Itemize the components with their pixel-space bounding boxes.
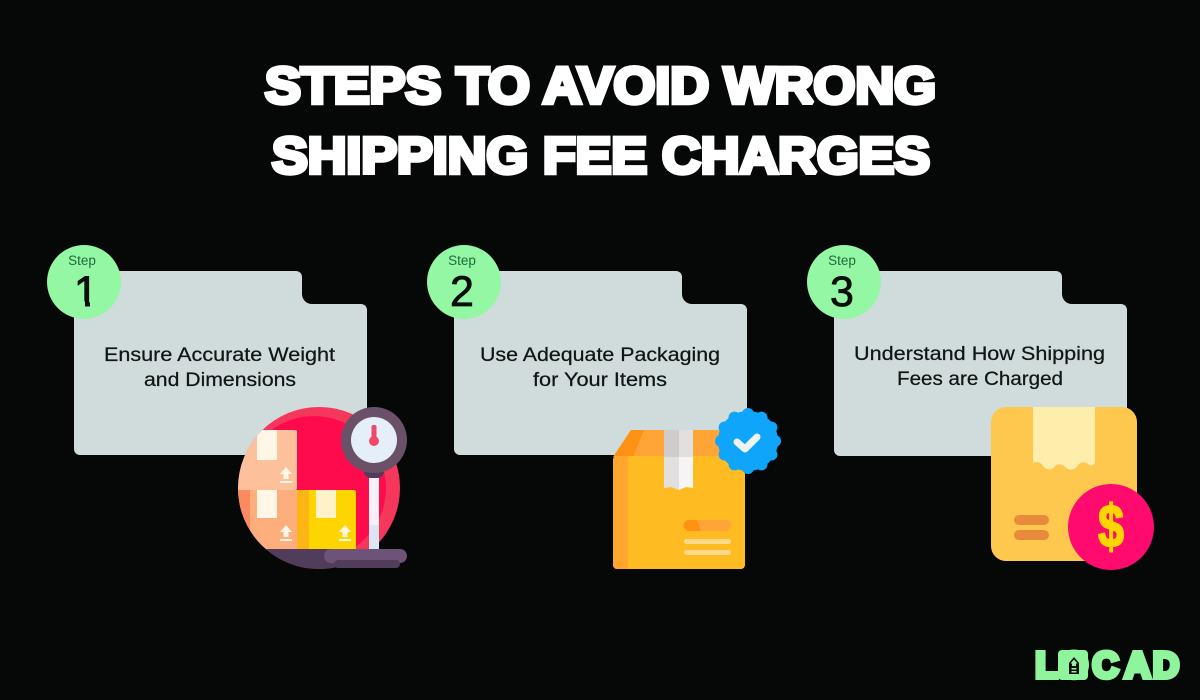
icon: parcel with dollar coin: $ [1098, 493, 1124, 560]
card 1 text: Ensure Accurate Weight [104, 344, 336, 366]
card 1 text: and Dimensions [144, 369, 296, 391]
icon: weighing scale with boxes [230, 407, 410, 571]
card 1 text [104, 344, 336, 391]
logo: LOCAD: LOCAD [1036, 644, 1179, 686]
step 2 badge: Step [448, 253, 476, 268]
card 3 text: Fees are Charged [897, 368, 1063, 390]
step 3 badge [807, 245, 881, 319]
card 3 text: Understand How Shipping [854, 343, 1105, 365]
step 1 badge: 1 [74, 268, 98, 316]
panel: step 1 [47, 245, 410, 571]
icon: cardboard box with verified badge [613, 408, 781, 569]
card 2 text: for Your Items [533, 369, 667, 391]
step 3 badge: 3 [830, 268, 854, 316]
icon: parcel with dollar coin [991, 407, 1154, 570]
card 2 text [480, 344, 720, 391]
card 3 background [834, 271, 1127, 456]
card 2 text: Use Adequate Packaging [480, 344, 720, 366]
card 1 background [74, 271, 367, 455]
panel: step 3 [807, 245, 1154, 570]
step 2 badge [427, 245, 501, 319]
step 1 badge [47, 245, 121, 319]
card 2 background [454, 271, 747, 455]
step 1 badge: Step [68, 253, 96, 268]
step 3 badge: Step [828, 253, 856, 268]
card 3 text [854, 343, 1105, 390]
title: STEPS TO AVOID WRONG [265, 57, 936, 114]
step 2 badge: 2 [450, 268, 474, 316]
title: SHIPPING FEE CHARGES [272, 127, 930, 184]
title [265, 57, 936, 184]
panel: step 2 [427, 245, 781, 569]
